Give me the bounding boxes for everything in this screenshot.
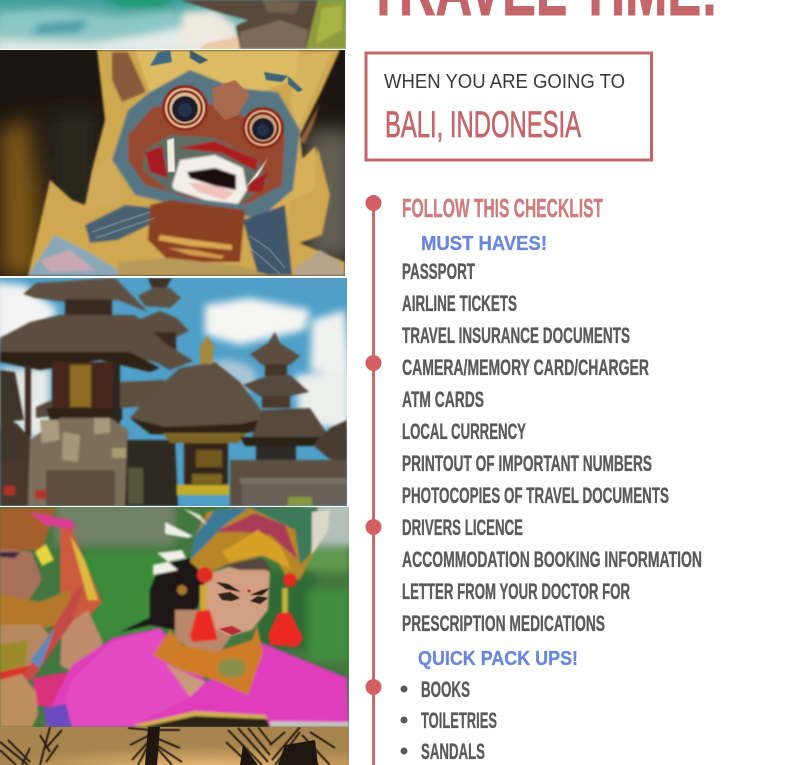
subtitle: when you are going to: WHEN YOU ARE GOING TO [384,71,625,93]
must haves list: DRIVERS LICENCE [402,515,523,540]
section heading: must haves: MUST HAVES! [421,233,547,255]
destination name: BALI, INDONESIA [385,104,581,145]
photo: Bali beach and cliffs [0,0,346,52]
must haves list: LETTER FROM YOUR DOCTOR FOR [402,579,630,604]
must haves list [402,259,702,636]
checklist heading: FOLLOW THIS CHECKLIST [402,193,603,223]
quick pack ups list: TOILETRIES [421,708,497,733]
must haves list: TRAVEL INSURANCE DOCUMENTS [402,323,630,348]
photo: Balinese Barong mask [0,50,355,276]
photo: sunset with palm silhouettes [0,727,349,765]
must haves list: CAMERA/MEMORY CARD/CHARGER [402,355,649,380]
photo: Balinese temple with thatched roofs [0,278,350,506]
must haves list: AIRLINE TICKETS [402,291,517,316]
timeline with dots [366,195,382,765]
quick pack ups list: BOOKS [421,677,470,702]
must haves list: PASSPORT [402,259,475,284]
must haves list: PRESCRIPTION MEDICATIONS [402,611,605,636]
destination box [366,53,652,160]
quick pack ups list [400,677,497,764]
must haves list: LOCAL CURRENCY [402,419,526,444]
photo: Balinese dancer in pink [0,500,355,727]
must haves list: ATM CARDS [402,387,484,412]
must haves list: PRINTOUT OF IMPORTANT NUMBERS [402,451,652,476]
quick pack ups list: SANDALS [421,739,485,764]
section heading: quick pack ups: QUICK PACK UPS! [418,648,578,670]
